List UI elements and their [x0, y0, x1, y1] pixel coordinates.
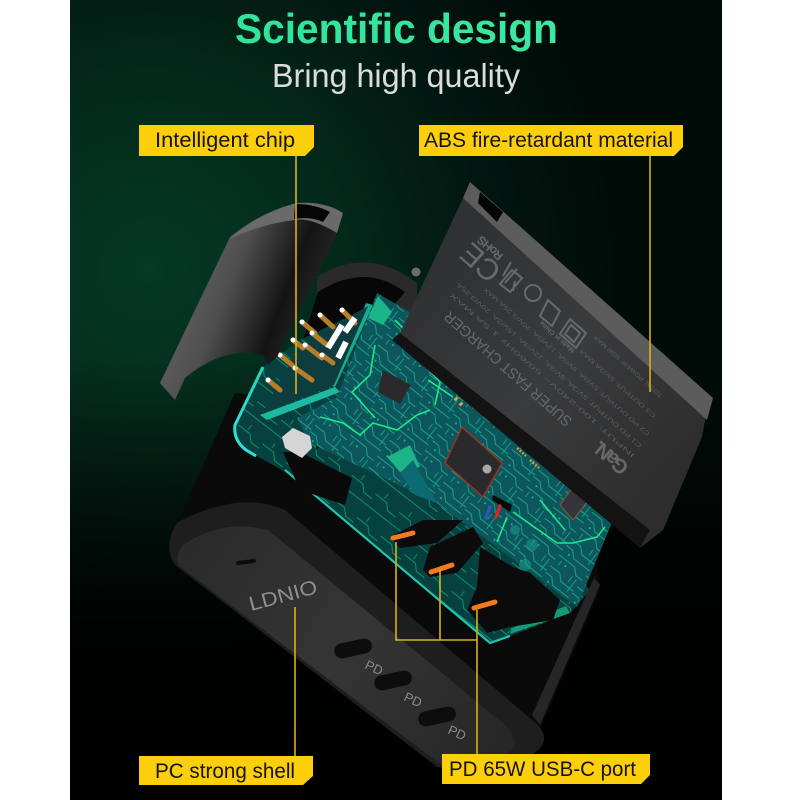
rear circuit board	[235, 303, 373, 480]
leader lines	[295, 156, 650, 756]
gold pins	[268, 310, 355, 390]
panel markings: CE	[454, 236, 508, 288]
panel markings: C2 PD OUTPUT: 5V/3A, 9V/3A, 12V/3A, 20V/3.25A MAX	[483, 285, 651, 436]
left top shell cover	[160, 203, 343, 400]
ABS panel cover	[392, 182, 713, 548]
panel markings: TOTAL POWER: 65W MAX	[593, 334, 664, 398]
plug prong	[282, 428, 352, 505]
main circuit board	[297, 293, 613, 607]
right side wall of housing	[532, 578, 600, 725]
panel markings: C3 OUTPUT: 5V/3A MAX	[579, 347, 657, 418]
lower circuit board	[285, 440, 590, 643]
label: ABS fire-retardant material: ABS fire-retardant material	[424, 128, 673, 152]
PD marks: PD	[402, 689, 424, 710]
title: Scientific design	[235, 5, 558, 52]
panel markings: INPUT: 100-240V~ 50/60Hz 1.5A MAX	[449, 291, 636, 458]
front shell	[169, 502, 544, 770]
USB-C ports	[333, 637, 457, 728]
panel markings: SUPER FAST CHARGER	[441, 307, 576, 430]
PD marks: PD	[363, 657, 385, 678]
subtitle: Bring high quality	[272, 57, 520, 94]
brand logo: LDNIO	[247, 576, 320, 616]
dotted via fields	[510, 525, 538, 571]
orange port contacts	[393, 533, 495, 608]
label: PC strong shell: PC strong shell	[155, 759, 295, 783]
panel markings: C1 PD OUTPUT: 5V/3A, 9V/3A, 12V/3A, 15V/3A, 20V/3.25A	[456, 281, 643, 448]
panel markings: RoHS	[474, 233, 506, 263]
panel markings	[441, 233, 664, 479]
label: PD 65W USB-C port: PD 65W USB-C port	[449, 757, 636, 781]
label: PC strong shell	[139, 756, 313, 785]
label: Intelligent chip: Intelligent chip	[155, 128, 295, 152]
bright circuit traces	[320, 320, 605, 543]
green copper areas	[368, 296, 420, 472]
charger exploded illustration	[160, 182, 713, 770]
PD marks	[363, 657, 468, 743]
certification icons	[500, 262, 586, 348]
panel markings: Made in China	[538, 319, 576, 354]
back housing of charger	[170, 262, 600, 730]
USB-C connectors	[390, 520, 560, 633]
label: Intelligent chip	[139, 125, 314, 156]
microchips	[378, 370, 587, 520]
indicator slot	[236, 559, 256, 565]
PD marks: PD	[446, 722, 468, 743]
panel markings: GaN.	[589, 436, 633, 479]
